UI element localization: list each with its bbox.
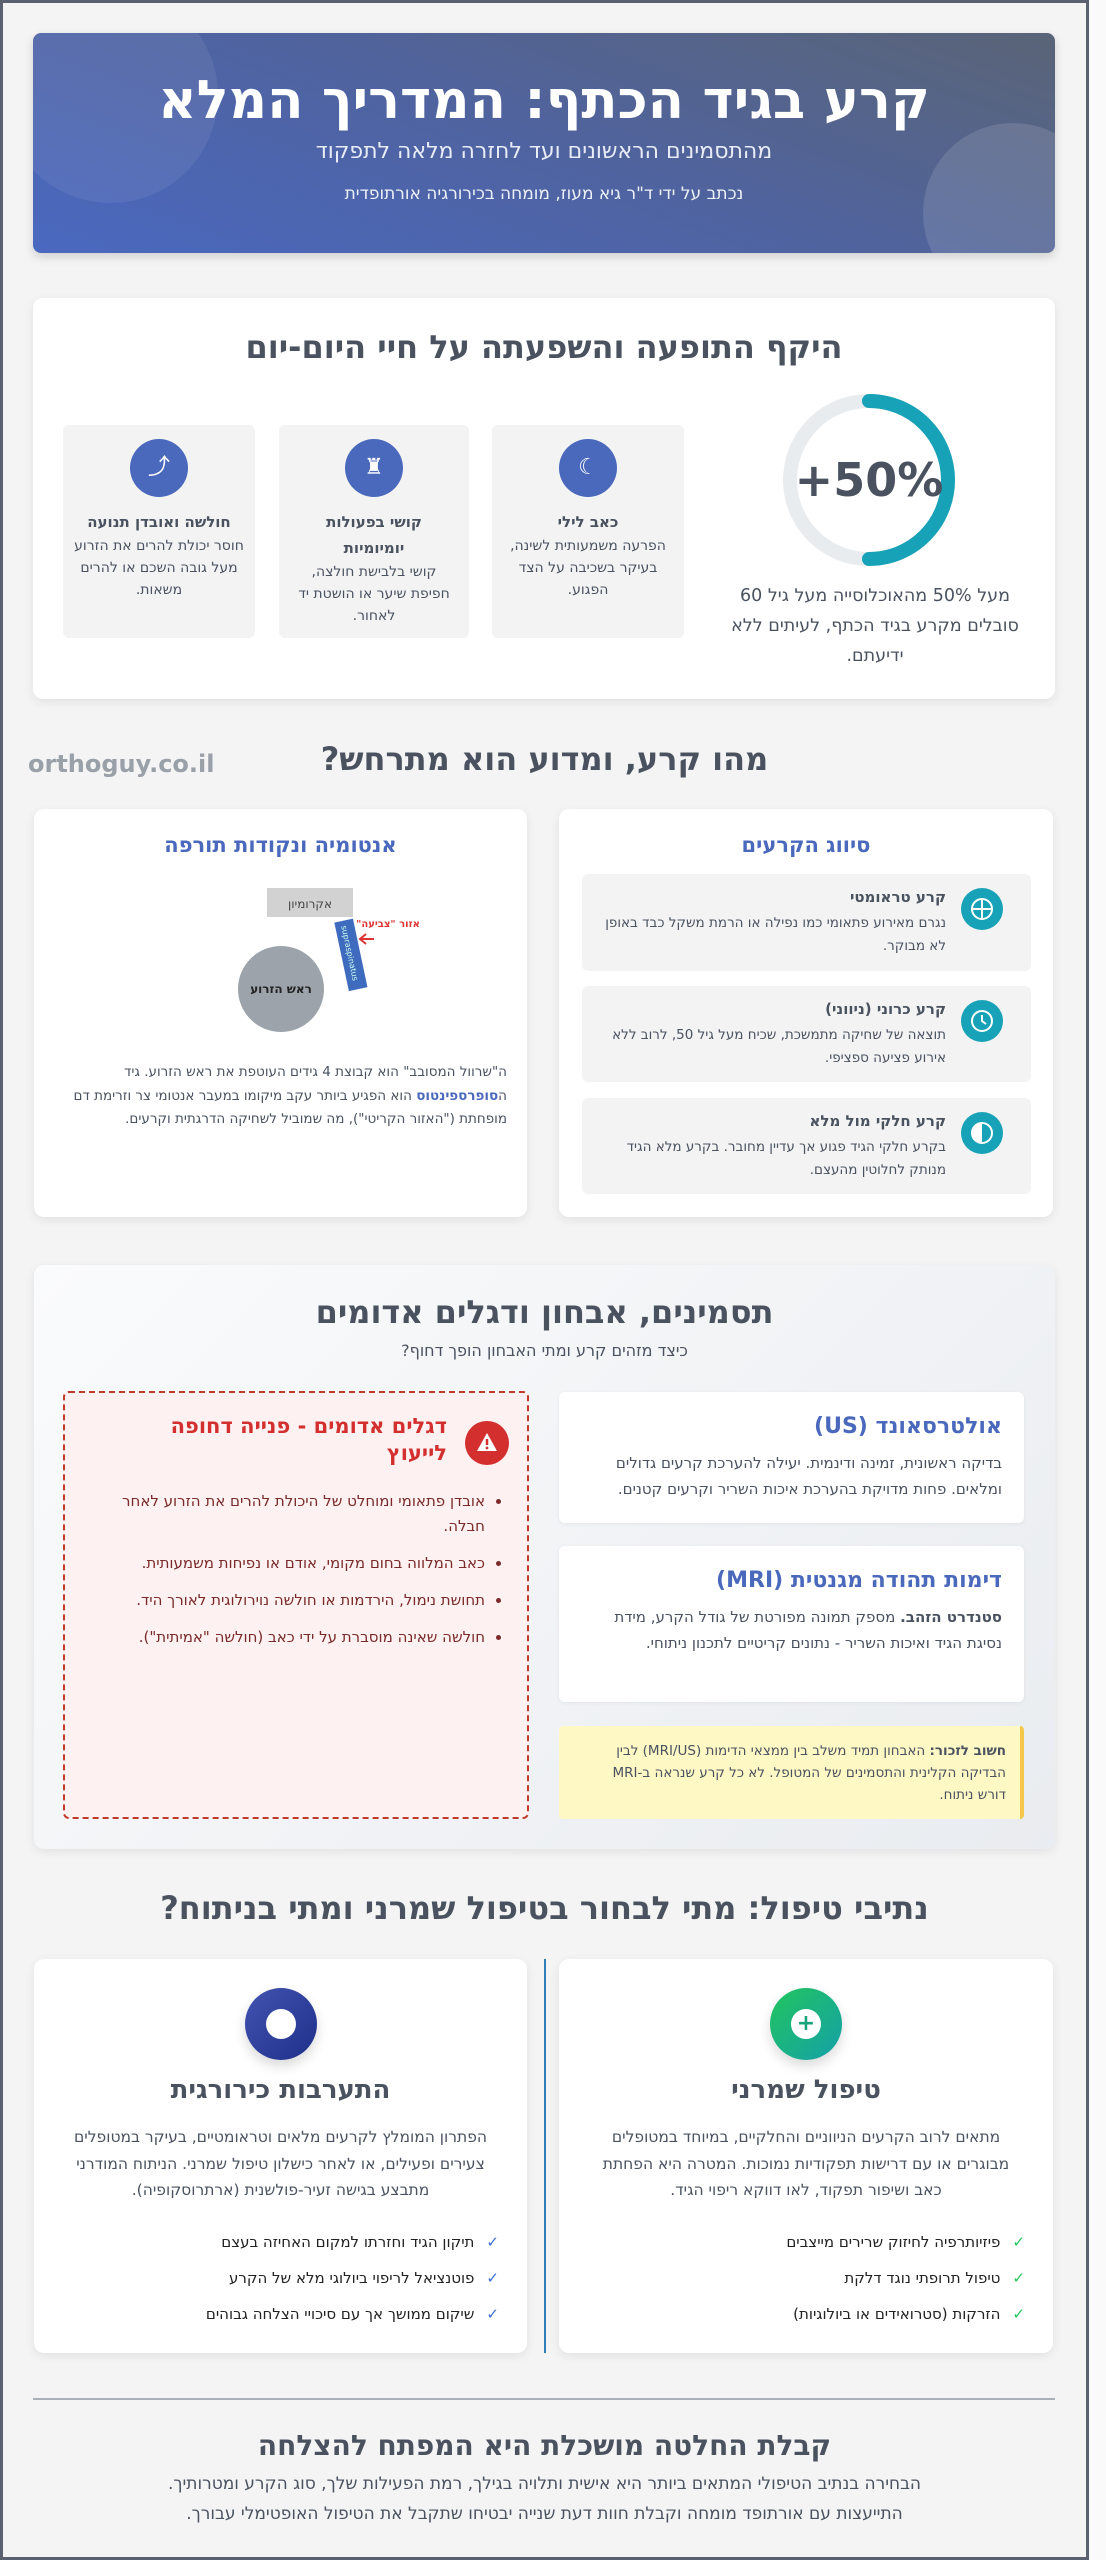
checklist: ✓תיקון הגיד וחזרתו למקום האחיזה בעצם: [221, 2233, 499, 2251]
item: traumatic: קרע טראומטי: [850, 888, 946, 906]
card: ultrasound: אולטרסאונד (US): [814, 1414, 1002, 1439]
panel: symptoms and diagnosis: [34, 1265, 1055, 1849]
card: MRI: [559, 1546, 1024, 1702]
anatomy diagram: supraspinatus: [339, 925, 360, 982]
impact card: weakness: [63, 425, 255, 638]
checklist: ✓שיקום ממושך אך עם סיכויי הצלחה גבוהים: [206, 2305, 499, 2323]
divider: vertical: [544, 1959, 546, 2353]
item: partial vs full: בקרע חלקי הגיד פגוע אך עדיין מחובר. בקרע מלא הגיד מנותק לחלוטין מהעצם.: [627, 1139, 946, 1178]
icon: warning: [465, 1421, 509, 1465]
anatomy diagram: אזור "צביעה": [356, 919, 420, 930]
heading: סיווג הקרעים: [742, 833, 870, 857]
author line: נכתב על ידי ד"ר גיא מעוז, מומחה בכירורגיה אורתופדית: [345, 184, 743, 204]
red flags list: תחושת נימול, הירדמות או חולשה נוירולוגית לאורך היד.: [136, 1591, 485, 1609]
item: chronic: [582, 986, 1031, 1082]
icon: arrow: [130, 439, 188, 497]
checklist: ✓טיפול תרופתי נוגד דלקת: [844, 2269, 1025, 2287]
icon: [961, 1000, 1003, 1042]
checklist: ✓הזרקות (סטרואידים או ביולוגיות): [793, 2305, 1025, 2323]
checklist: [206, 2233, 499, 2323]
impact card: night pain: [492, 425, 684, 638]
panel: surgical intervention: [34, 1959, 527, 2353]
heading: תסמינים, אבחון ודגלים אדומים: [316, 1293, 773, 1331]
section heading: treatment paths: נתיבי טיפול: מתי לבחור בטיפול שמרני ומתי בניתוח?: [160, 1889, 929, 1927]
donut chart 50%: +50%: [795, 453, 943, 507]
item: partial vs full: קרע חלקי מול מלא: [809, 1112, 946, 1130]
description: הפתרון המומלץ לקרעים מלאים וטראומטיים, בעיקר במטופלים צעירים ופעילים, או לאחר כישלון טיפול שמרני. הניתוח המודרני מתבצע בגישה זעיר-פולשנית (ארתרוסקופיה).: [74, 2128, 487, 2199]
card: ultrasound: בדיקה ראשונית, זמינה ודינמית. יעילה להערכת קרעים גדולים ומלאים. פחות מדויקת בהערכת איכות השריר וקרעים קטנים.: [616, 1454, 1002, 1498]
red flags list: חולשה שאינה מוסברת על ידי כאב (חולשה "אמיתית").: [139, 1628, 485, 1646]
icon: moon: ☾: [578, 455, 598, 480]
panel: conservative treatment: [559, 1959, 1053, 2353]
red flags list: [122, 1492, 501, 1646]
subheading: כיצד מזהים קרע ומתי האבחון הופך דחוף?: [401, 1341, 688, 1360]
callout: red flags: [63, 1391, 529, 1819]
impact card: daily activities: [279, 425, 469, 638]
red flags list: אובדן פתאומי ומוחלט של היכולת להרים את הזרוע לאחר חבלה.: [122, 1492, 485, 1535]
anatomy diagram: [238, 888, 420, 1032]
heading: טיפול שמרני: [731, 2075, 881, 2105]
icon: ring: [245, 1988, 317, 2060]
heading: היקף התופעה והשפעתה על חיי היום-יום: [245, 328, 842, 366]
icon: moon: [559, 439, 617, 497]
panel: anatomy: [34, 809, 527, 1217]
heading: אנטומיה ונקודות תורפה: [164, 833, 397, 857]
panel: prevalence and impact: [33, 298, 1055, 699]
item: chronic: תוצאה של שחיקה מתמשכת, שכיח מעל גיל 50, לרוב ללא אירוע פציעה ספציפי.: [612, 1027, 946, 1066]
conclusion text: הבחירה בנתיב הטיפולי המתאים ביותר היא אישית ותלויה בגילך, רמת הפעילות שלך, סוג הקרע ומטרותיך.: [168, 2474, 921, 2494]
card: ultrasound: [559, 1392, 1024, 1523]
impact card: daily activities: קושי בפעולות יומיומיות: [326, 513, 422, 557]
callout: important note: חשוב לזכור: האבחון תמיד משלב בין ממצאי הדימות (MRI/US) לבין הבדיקה הקלינית והתסמינים של המטופל. לא כל קרע שנראה ב-MRI דורש ניתוח.: [613, 1743, 1006, 1803]
anatomy diagram: ראש הזרוע: [250, 982, 312, 996]
watermark: orthoguy.co.il: [28, 750, 214, 778]
conclusion text: [168, 2474, 921, 2524]
anatomy text: ה"שרוול המסובב" הוא קבוצת 4 גידים העוטפת את ראש הזרוע. גיד הסופרספינטוס הוא הפגיע ביותר עקב מיקומו במעבר אנטומי צר וזרימת דם מופחתת ("האזור הקריטי"), מה שמוביל לשחיקה הדרגתית וקרעים.: [73, 1064, 507, 1127]
item: traumatic: נגרם מאירוע פתאומי כמו נפילה או הרמת משקל כבד באופן לא מבוקר.: [605, 915, 946, 954]
card: MRI: סטנדרט הזהב. מספק תמונה מפורטת של גודל הקרע, מידת נסיגת הגיד ואיכות השריר - נתונים קריטיים לתכנון ניתוחי.: [614, 1608, 1002, 1652]
impact card: night pain: כאב לילי: [558, 513, 618, 531]
heading: התערבות כירורגית: [171, 2075, 390, 2105]
icon: person: [345, 439, 403, 497]
subtitle: מהתסמינים הראשונים ועד לחזרה מלאה לתפקוד: [316, 139, 772, 164]
icon: [961, 1112, 1003, 1154]
impact card: daily activities: קושי בלבישת חולצה, חפיפת שיער או הושטת יד לאחור.: [298, 564, 450, 624]
item: partial vs full: [582, 1098, 1031, 1194]
icon: plus: [770, 1988, 842, 2060]
red flags list: כאב המלווה בחום מקומי, אודם או נפיחות משמעותית.: [142, 1554, 485, 1572]
icon: plus: +: [797, 2011, 815, 2036]
panel: tear classification: [559, 809, 1053, 1217]
checklist: ✓פוטנציאל לריפוי ביולוגי מלא של הקרע: [229, 2269, 499, 2287]
icon: person: ♜: [364, 455, 384, 480]
conclusion heading: קבלת החלטה מושכלת היא המפתח להצלחה: [258, 2429, 831, 2462]
stat text: מעל 50% מהאוכלוסייה מעל גיל 60 סובלים מקרע בגיד הכתף, לעיתים ללא ידיעתם.: [731, 586, 1019, 666]
item: chronic: קרע כרוני (ניווני): [825, 1000, 946, 1018]
anatomy diagram: אקרומיון: [288, 897, 332, 911]
conclusion text: התייעצות עם אורתופד מומחה וקבלת חוות דעת שנייה יבטיחו שתקבל את הטיפול האופטימלי עבורך.: [186, 2504, 903, 2524]
checklist: ✓פיזיותרפיה לחיזוק שרירים מייצבים: [786, 2233, 1025, 2251]
header banner: [33, 33, 1055, 253]
impact card: night pain: הפרעה משמעותית לשינה, בעיקר בשכיבה על הצד הפגוע.: [510, 538, 666, 598]
icon: arrow: ⤴: [148, 455, 170, 480]
section heading: what is a tear: מהו קרע, ומדוע הוא מתרחש?: [321, 740, 768, 778]
red flags heading: דגלים אדומים - פנייה דחופה לייעוץ: [171, 1414, 447, 1465]
item: traumatic: [582, 874, 1031, 971]
icon: [961, 888, 1003, 930]
description: מתאים לרוב הקרעים הניווניים והחלקיים, במיוחד במטופלים מבוגרים או עם דרישות תפקודיות נמוכות. המטרה היא הפחתת כאב ושיפור תפקוד, לאו דווקא ריפוי הגיד.: [603, 2128, 1009, 2199]
impact card: weakness: חולשה ואובדן תנועה: [87, 513, 231, 531]
card: MRI: דימות תהודה מגנטית (MRI): [716, 1568, 1002, 1593]
impact card: weakness: חוסר יכולת להרים את הזרוע מעל גובה השכם או להרים משאות.: [74, 538, 244, 598]
donut chart 50%: [783, 394, 955, 566]
callout: important note: [559, 1726, 1024, 1819]
checklist: [786, 2233, 1025, 2323]
title: קרע בגיד הכתף: המדריך המלא: [158, 70, 930, 131]
